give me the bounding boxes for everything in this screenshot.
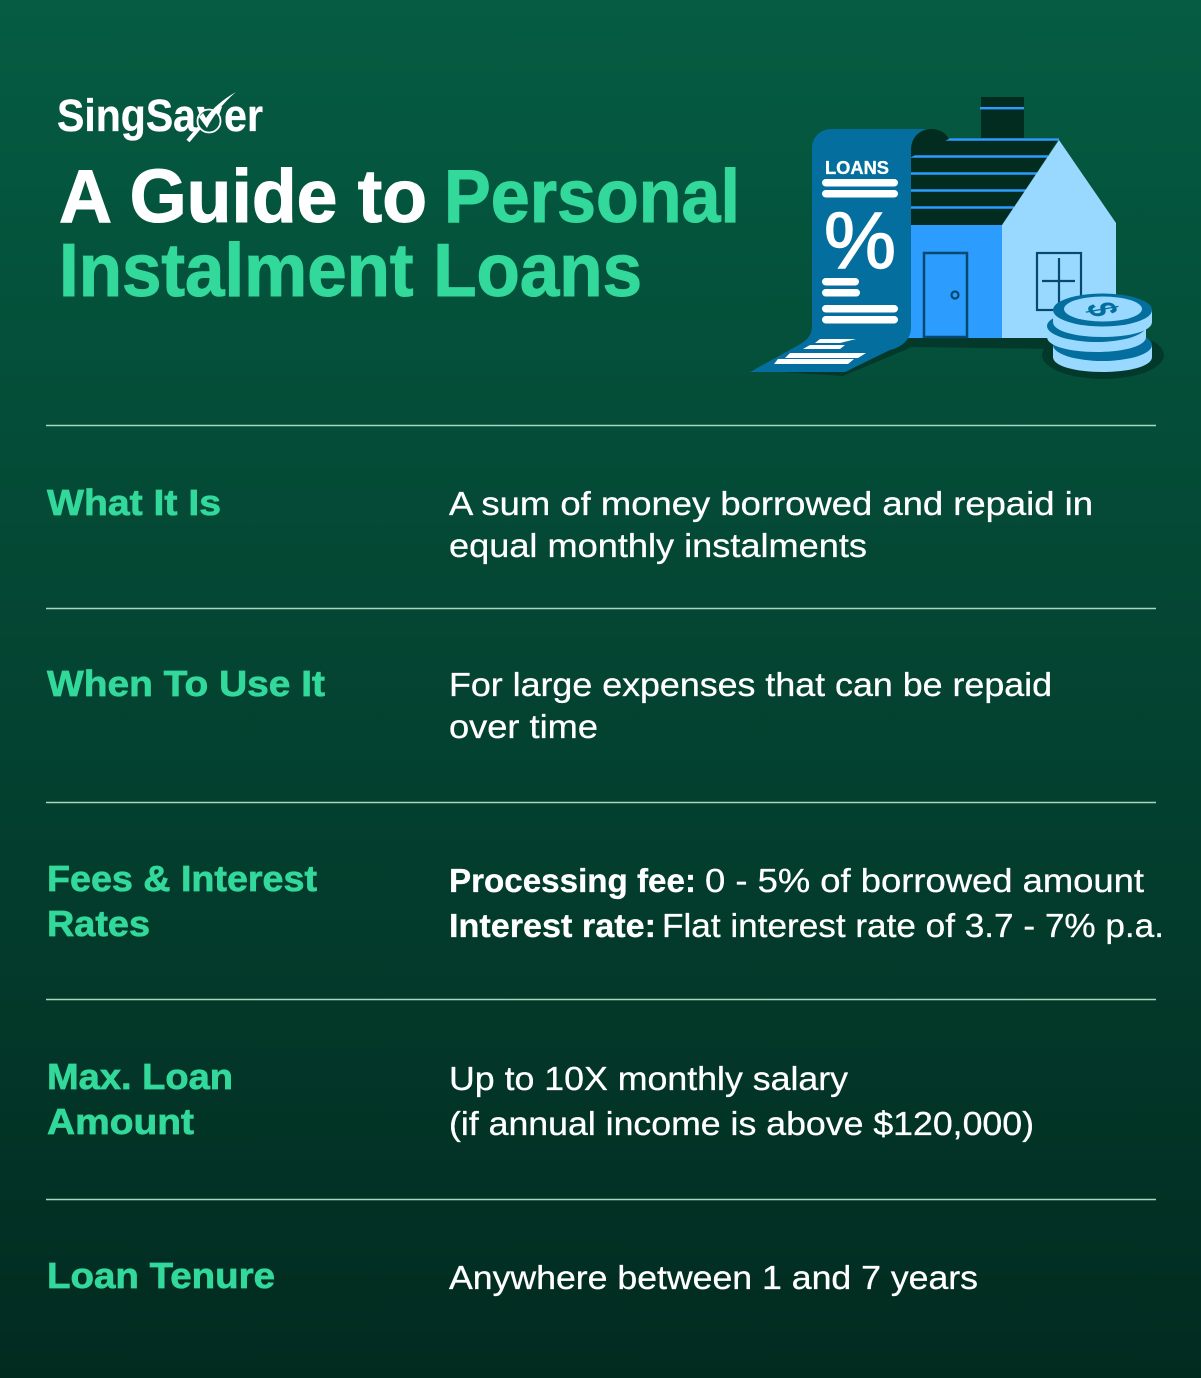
row: Fees & Interest Rates bbox=[47, 858, 1164, 944]
title bbox=[59, 154, 740, 312]
text block: (if annual income is above $120,000) bbox=[449, 1105, 1034, 1142]
panel: loan document: LOANS bbox=[825, 158, 889, 178]
heading bbox=[47, 858, 317, 944]
icon: roof bbox=[905, 138, 1059, 225]
text block: equal monthly instalments bbox=[449, 527, 867, 564]
row: Max. Loan Amount bbox=[47, 1056, 1034, 1142]
title: Personal bbox=[444, 154, 740, 238]
heading: What It Is bbox=[47, 482, 221, 523]
row: When To Use It bbox=[47, 663, 1052, 745]
icon: front wall bbox=[905, 225, 1002, 338]
text block: Anywhere between 1 and 7 years bbox=[449, 1259, 978, 1296]
text block: For large expenses that can be repaid bbox=[449, 666, 1052, 703]
title: Instalment Loans bbox=[59, 228, 642, 312]
text block bbox=[449, 1060, 1034, 1142]
text block: Up to 10X monthly salary bbox=[449, 1060, 849, 1097]
text block bbox=[449, 485, 1093, 564]
text block bbox=[449, 862, 1164, 944]
text block: A sum of money borrowed and repaid in bbox=[449, 485, 1093, 522]
top coin bbox=[1053, 310, 1152, 337]
panel: loan document: % bbox=[824, 196, 896, 285]
illustration: house with loan document and coins bbox=[750, 97, 1164, 379]
heading: Amount bbox=[47, 1101, 194, 1142]
icon: gable wall bbox=[1002, 140, 1116, 338]
text block bbox=[449, 666, 1052, 745]
text block: over time bbox=[449, 708, 598, 745]
text block: Interest rate: bbox=[449, 907, 656, 944]
heading: When To Use It bbox=[47, 663, 325, 704]
text block: 0 - 5% of borrowed amount bbox=[705, 862, 1144, 899]
ground shadow bbox=[750, 338, 1060, 376]
icon: coin stack bbox=[1042, 294, 1164, 379]
heading: Rates bbox=[47, 903, 150, 944]
text block: Flat interest rate of 3.7 - 7% p.a. bbox=[662, 907, 1164, 944]
icon: chimney bbox=[980, 97, 1024, 139]
panel: loan document bbox=[750, 129, 927, 372]
middle coin bbox=[1047, 326, 1146, 352]
bottom coin bbox=[1053, 345, 1152, 372]
icon: paper curl bbox=[905, 129, 949, 160]
row: Loan Tenure bbox=[47, 1255, 978, 1296]
logo: SingSaver: SingSa bbox=[57, 90, 197, 141]
icon: window bbox=[1037, 253, 1081, 310]
row: What It Is bbox=[47, 482, 1093, 564]
dividers bbox=[46, 426, 1156, 1200]
icon: door bbox=[924, 253, 967, 337]
heading: Max. Loan bbox=[47, 1056, 233, 1097]
logo: SingSaver: er bbox=[224, 90, 263, 141]
icon: coin stack: $ bbox=[1076, 299, 1128, 319]
text block: Processing fee: bbox=[449, 862, 696, 899]
heading: Loan Tenure bbox=[47, 1255, 275, 1296]
heading bbox=[47, 1056, 233, 1142]
logo: SingSaver: v bbox=[197, 90, 222, 141]
heading: Fees & Interest bbox=[47, 858, 317, 899]
title: A Guide to bbox=[59, 154, 427, 238]
